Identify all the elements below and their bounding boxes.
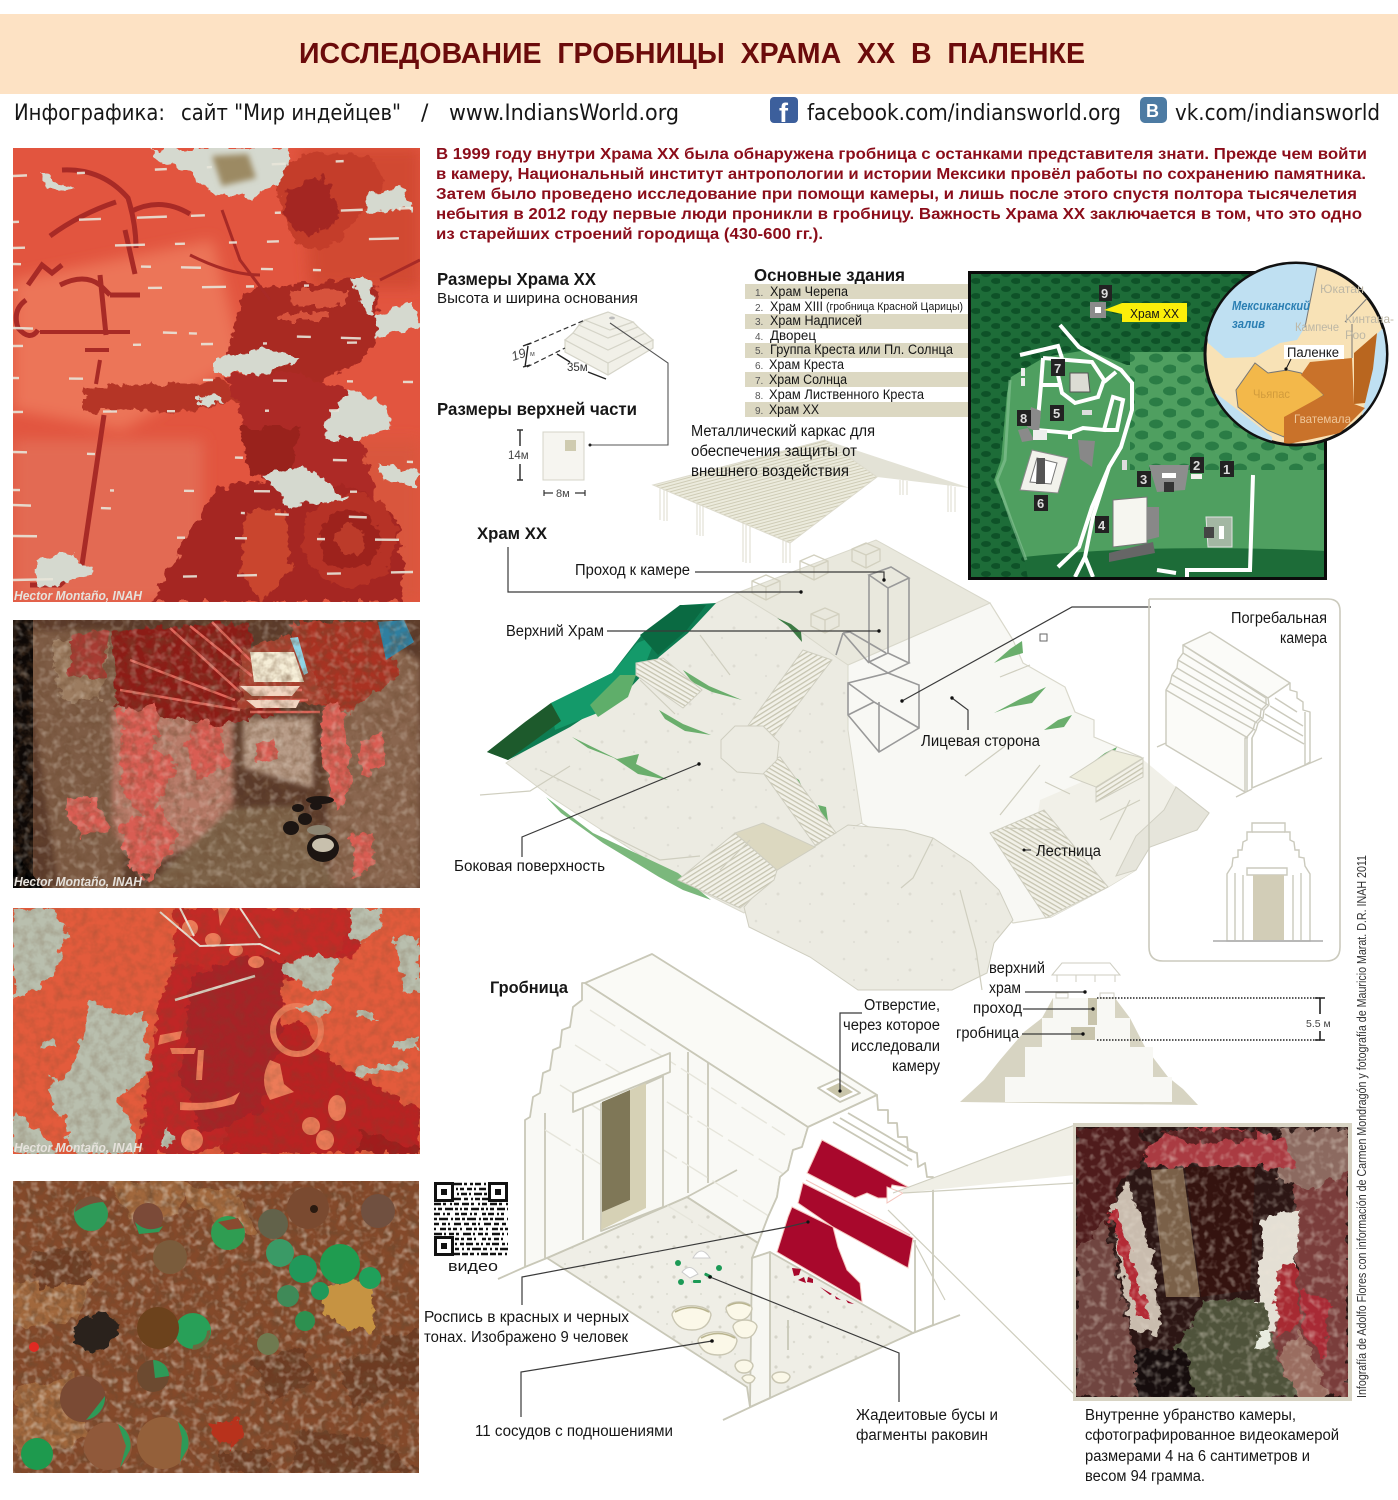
building 3 [1149, 465, 1189, 492]
heading: temple dimensions [437, 269, 638, 307]
offering bowls [283, 796, 339, 862]
leader: burial chamber [900, 607, 1151, 703]
label: metal frame: обеспечения защиты от [691, 443, 857, 460]
label: metal frame: Металлический каркас для [691, 423, 875, 440]
diagram: protective roof [653, 440, 970, 563]
heading: temple XX: Храм ХХ [477, 525, 547, 543]
green streaks [572, 641, 1117, 821]
label: mural [424, 1220, 810, 1346]
map number tags: 8 [1020, 411, 1027, 426]
green beads [21, 1187, 395, 1470]
list: main buildings: Храм Солнца [769, 372, 847, 387]
label: jade beads: Жадеитовые бусы и [856, 1407, 998, 1424]
intro text: небытия в 2012 году первые люди проникли в гробницу. Важность Храма ХХ заключается в том, что это одно [436, 206, 1362, 223]
callout: temple XX [1104, 303, 1187, 322]
list: main buildings: Храм Черепа [770, 284, 848, 299]
map number tags: 5 [1053, 406, 1060, 421]
ceiling beams [50, 622, 400, 726]
intro text: В 1999 году внутри Храма ХХ была обнаружена гробница с останками представителя знати. Прежде чем войти [436, 146, 1367, 163]
figure body [86, 152, 404, 602]
door [601, 1076, 663, 1231]
photo credit: Hector Montaño, INAH [14, 589, 143, 603]
label: Palenque: Паленке [1287, 345, 1339, 360]
map: site plan of Palenque [968, 271, 1327, 580]
lintel [573, 1053, 670, 1112]
icon: facebook [770, 97, 798, 128]
label: jade beads [708, 1275, 998, 1444]
photo caption: Внутренне убранство камеры, [1085, 1407, 1296, 1424]
building 2 [1191, 474, 1202, 479]
panel: burial chamber inset: камера [1280, 630, 1327, 647]
list: main buildings: Храм Креста [769, 357, 844, 372]
list: main buildings: Дворец [770, 328, 816, 343]
illustration: tomb cutaway [498, 954, 960, 1420]
QR code [434, 1182, 508, 1256]
roof hole [818, 1079, 860, 1102]
photo credit: Hector Montaño, INAH [14, 1141, 143, 1155]
plaster flecks [13, 158, 413, 580]
diagram: temple cross-section: храм [989, 980, 1021, 997]
label: opening: камеру [892, 1058, 940, 1075]
photo: video camera view of chamber [1073, 1123, 1352, 1401]
red flecks [792, 1268, 854, 1304]
mural fragment box [887, 1187, 903, 1203]
centre ruins [1078, 440, 1095, 467]
credits line: сайт "Мир индейцев" [181, 101, 401, 126]
map number tags: 6 [1037, 496, 1044, 511]
list: main buildings: 4. [755, 332, 763, 343]
intro text: Затем было проведено исследование при помощи камеры, и лишь после этого спустя полтора тысячелетия [436, 186, 1357, 203]
red wall stains [66, 700, 384, 882]
chamber from the front [1227, 823, 1310, 941]
interior back wall [752, 1095, 933, 1333]
list: main buildings: Основные здания [754, 265, 905, 285]
red mural lower [777, 1207, 862, 1302]
list: main buildings: 9. [755, 406, 763, 417]
list: main buildings: 7. [755, 376, 763, 387]
front mound [744, 825, 1013, 990]
inset map: location of Palenque: Юкатан [1320, 282, 1364, 296]
diagram: stepped pyramid with dimensions: м [530, 351, 535, 358]
photo: jade beads on the floor [13, 1181, 420, 1473]
label: side surface [454, 762, 701, 875]
label: mural: Роспись в красных и черных [424, 1309, 629, 1326]
map number tags: 1 [1223, 462, 1230, 477]
map number tags: 9 [1101, 286, 1108, 301]
ground lines [498, 1267, 960, 1420]
panel: burial chamber inset [1149, 599, 1340, 961]
heading: tomb: Гробница [490, 979, 569, 997]
stairs [747, 650, 832, 737]
vk address: vk.com/indiansworld [1175, 101, 1380, 126]
label: metal frame [691, 423, 875, 480]
red mural middle [798, 1183, 913, 1268]
label: vessels [475, 1339, 714, 1440]
label: mural: тонах. Изображено 9 человек [424, 1329, 628, 1346]
label: upper temple: Верхний Храм [506, 623, 604, 640]
list: main buildings: Группа Креста или Пл. Солнца [770, 342, 953, 357]
list: main buildings: Храм XIII [770, 299, 823, 314]
inset map: location of Palenque: Чьяпас [1253, 387, 1290, 401]
stair block upper [636, 658, 702, 708]
label: opening [838, 997, 940, 1093]
diagram: top platform plan: 8м [556, 488, 570, 500]
figure lines [16, 170, 420, 585]
icon: vk [1140, 97, 1167, 123]
label: opening: Отверстие, [864, 997, 940, 1014]
photo caption: весом 94 грамма. [1085, 1468, 1205, 1485]
building 6 [1020, 450, 1068, 493]
plaster patches [13, 908, 420, 1154]
jade and shells [675, 1260, 722, 1285]
diagram: temple cross-section: 5.5 м [1306, 1018, 1331, 1030]
title banner: ИССЛЕДОВАНИЕ ГРОБНИЦЫ ХРАМА ХХ В ПАЛЕНКЕ [299, 38, 1085, 70]
list: main buildings: 6. [755, 361, 763, 372]
diagram: stepped pyramid with dimensions: 19 [509, 345, 528, 364]
map number tags [1017, 285, 1234, 533]
stair block right [1070, 750, 1143, 802]
temple plan boxes [752, 543, 880, 633]
diagram: temple cross-section: гробница [956, 1025, 1019, 1042]
diagram: top platform plan: 14м [508, 450, 529, 462]
photo caption: размерами 4 на 6 сантиметров и [1085, 1448, 1310, 1465]
list: main buildings: Храм Надписей [770, 313, 862, 328]
stair block lower [678, 823, 815, 908]
heading: temple dimensions: Высота и ширина основания [437, 290, 638, 307]
photo caption [1085, 1407, 1339, 1485]
list: main buildings: 5. [755, 346, 763, 357]
left slope [506, 593, 862, 913]
diagram: temple cross-section [956, 960, 1331, 1105]
label: passage to chamber [508, 547, 886, 594]
front pillar [750, 1252, 770, 1407]
diagram: stepped pyramid with dimensions: 35м [567, 362, 588, 374]
diagram: temple cross-section: верхний [989, 960, 1045, 977]
QR caption: видео [448, 1258, 498, 1275]
cracks [480, 635, 1140, 990]
inset map: location of Palenque: Кинтана- [1345, 312, 1394, 326]
skylight [250, 652, 304, 682]
top platform [737, 540, 990, 665]
credits line: / [421, 101, 429, 126]
callout: temple XX: Храм ХХ [1130, 306, 1179, 321]
map number tags: 2 [1193, 458, 1200, 473]
diagram: top platform plan [508, 430, 585, 500]
list: main buildings: Храм ХХ [769, 402, 819, 417]
label: vessels: 11 сосудов с подношениями [475, 1423, 673, 1440]
photo: burial chamber interior [13, 620, 420, 900]
right face [837, 603, 1209, 923]
list: main buildings: 8. [755, 391, 763, 402]
label: passage to chamber: Проход к камере [575, 562, 690, 579]
map number tags: 7 [1054, 361, 1061, 376]
red mural top [807, 1140, 910, 1198]
intro text: в камеру, Национальный институт антропологии и истории Мексики провёл работы по сохранению памятника. [436, 166, 1366, 183]
title banner [0, 14, 1398, 94]
inset map: location of Palenque: залив [1232, 317, 1265, 331]
palace [1109, 497, 1159, 562]
intro text [436, 146, 1367, 243]
label: jade beads: фагменты раковин [856, 1427, 988, 1444]
list: main buildings: 3. [755, 317, 763, 328]
intro text: из старейших строений городища (430-600 гг.). [436, 226, 823, 243]
inset map: location of Palenque: Кампече [1295, 320, 1339, 334]
inset map: location of Palenque: Мексиканский [1232, 299, 1310, 313]
icon: vk: В [1146, 101, 1159, 121]
floor [547, 1197, 913, 1407]
illustration: excavated pyramid [480, 540, 1209, 990]
zoom wedge to chamber photo [888, 1125, 1075, 1395]
heading: upper part dimensions: Размеры верхней части [437, 399, 637, 419]
green vegetation edge [487, 603, 716, 760]
credits line [14, 101, 679, 126]
buildings west [1021, 368, 1025, 376]
map number tags: 3 [1140, 472, 1147, 487]
diagram: stepped pyramid with dimensions [509, 312, 668, 446]
map number tags: 4 [1098, 518, 1106, 533]
photo: mural fragment [13, 908, 420, 1154]
panel: burial chamber inset: Погребальная [1231, 610, 1327, 627]
temple 20 marker [1090, 302, 1106, 318]
vertical credit: Infografía de Adolfo Flores con información de Carmen Mondragón y fotografía de Mauricio Marat. D.R. INAH 2011 [1354, 855, 1369, 1398]
label: side surface: Боковая поверхность [454, 858, 605, 875]
label: stairs: Лестница [1036, 843, 1101, 860]
right lobe [1116, 787, 1209, 876]
label: upper temple [506, 623, 881, 640]
credits line: www.IndiansWorld.org [449, 101, 679, 126]
photo credit: Hector Montaño, INAH [14, 875, 143, 889]
facebook address: facebook.com/indiansworld.org [807, 101, 1121, 126]
label: front side [921, 696, 1040, 750]
photo: mural with a figure [13, 148, 420, 602]
lower right slope [1031, 757, 1209, 917]
wire frame of the shaft [836, 567, 919, 752]
building south [1204, 517, 1232, 547]
orange ornaments [158, 908, 346, 1151]
diagram: temple cross-section: проход [973, 1000, 1022, 1017]
offering bowls [672, 1302, 790, 1383]
list: main buildings: 2. [755, 303, 763, 314]
label: opening: исследовали [851, 1038, 940, 1055]
plaster patches [36, 148, 420, 586]
heading: temple dimensions: Размеры Храма ХХ [437, 269, 596, 289]
list: main buildings [745, 265, 968, 417]
label: metal frame: внешнего воздействия [691, 463, 849, 480]
list: main buildings: Храм Лиственного Креста [769, 387, 924, 402]
icon: facebook: f [779, 98, 789, 128]
list: main buildings: 1. [755, 288, 763, 299]
roof [585, 954, 877, 1127]
inset map: location of Palenque [1200, 262, 1394, 448]
credits line: Инфографика: [14, 101, 165, 126]
inset map: location of Palenque: Роо [1345, 328, 1366, 342]
inset map: location of Palenque: Гватемала [1294, 412, 1351, 426]
side wall [525, 983, 808, 1267]
list: main buildings: (гробница Красной Царицы) [826, 301, 963, 313]
label: front side: Лицевая сторона [921, 733, 1040, 750]
Palenque marker [1284, 359, 1291, 371]
label: opening: через которое [843, 1017, 940, 1034]
photo caption: сфотографированное видеокамерой [1085, 1427, 1339, 1444]
chamber in perspective [1157, 632, 1322, 797]
building 7 [1070, 373, 1090, 392]
